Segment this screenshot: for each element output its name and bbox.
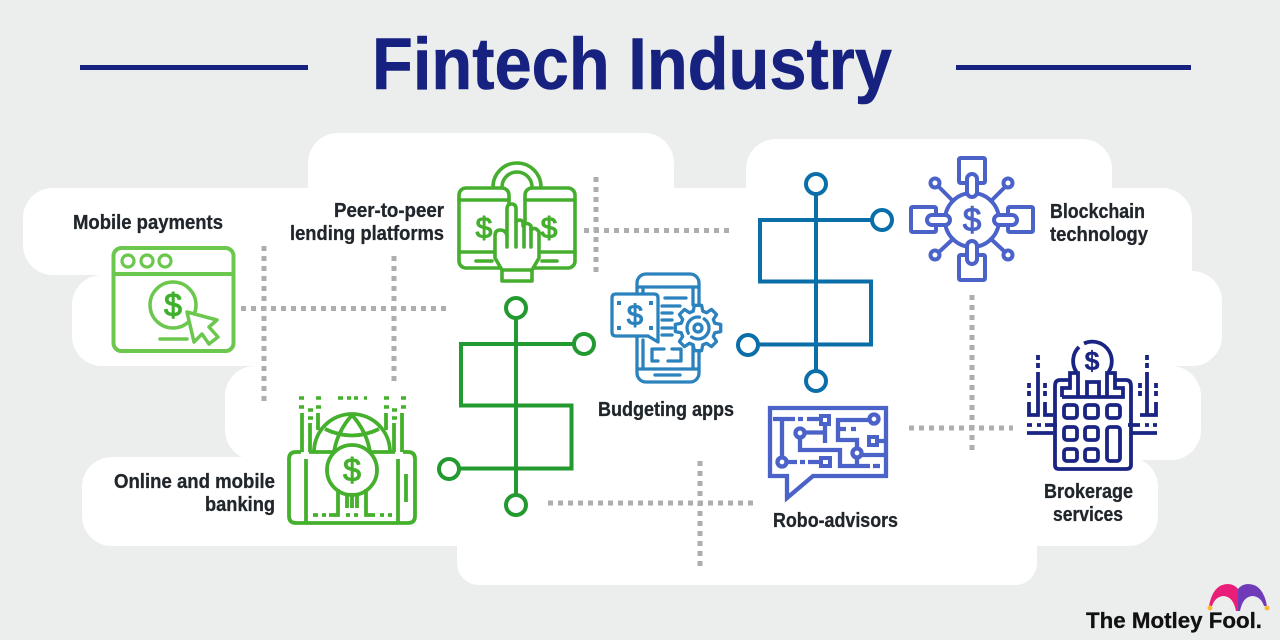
label: blockchain technology: Blockchain bbox=[1050, 201, 1145, 223]
label: blockchain technology bbox=[1050, 201, 1149, 246]
label: online and mobile banking: banking bbox=[205, 494, 275, 516]
label: budgeting apps: Budgeting apps bbox=[598, 399, 734, 421]
blue flow diagram bbox=[738, 174, 892, 391]
icon: browser window with dollar and cursor: $ bbox=[164, 287, 182, 323]
label: brokerage services bbox=[1044, 481, 1133, 526]
icon: two phones with hand bbox=[459, 163, 575, 281]
label: blockchain technology: technology bbox=[1050, 224, 1149, 246]
label: brokerage services: Brokerage bbox=[1044, 481, 1133, 503]
icon: phone with dollar bubble and gear bbox=[612, 274, 721, 382]
label: peer-to-peer lending platforms: lending platforms bbox=[290, 223, 444, 245]
label: online and mobile banking: Online and mobile bbox=[114, 471, 275, 493]
label: robo-advisors: Robo-advisors bbox=[773, 510, 898, 532]
title: Fintech Industry bbox=[372, 24, 892, 105]
logo: The Motley Fool: The Motley Fool. bbox=[1086, 608, 1262, 633]
white cloud background panel bbox=[23, 133, 1222, 585]
icon: brokerage building: $ bbox=[1084, 346, 1100, 376]
label: mobile payments: Mobile payments bbox=[73, 212, 223, 234]
label: peer-to-peer lending platforms bbox=[290, 200, 444, 245]
title rule right bbox=[956, 65, 1191, 70]
icon: globe and phone banking: $ bbox=[343, 452, 361, 488]
dotted connector: peer-to-peer bbox=[584, 177, 730, 272]
dotted connector: bottom centre bbox=[548, 461, 754, 566]
title rule left bbox=[80, 65, 308, 70]
label: brokerage services: services bbox=[1053, 504, 1123, 526]
icon: circuit speech bubble bbox=[770, 408, 886, 498]
green flow diagram bbox=[439, 298, 594, 515]
label: peer-to-peer lending platforms: Peer-to-peer bbox=[334, 200, 444, 222]
icon: blockchain network bbox=[911, 158, 1033, 280]
icon: globe and phone banking bbox=[289, 398, 415, 524]
logo: The Motley Fool bbox=[1086, 584, 1270, 633]
label: online and mobile banking bbox=[114, 471, 275, 516]
icon: phone with dollar bubble and gear: $ bbox=[627, 300, 643, 332]
icon: two phones with hand: $ bbox=[541, 212, 558, 245]
dotted connector: mobile payments bbox=[241, 246, 447, 401]
icon: blockchain network: $ bbox=[963, 201, 981, 238]
icon: browser window with dollar and cursor bbox=[114, 248, 234, 351]
icon: two phones with hand: $ bbox=[476, 212, 493, 245]
dotted connector: right side bbox=[909, 295, 1013, 450]
icon: brokerage building bbox=[1027, 342, 1157, 469]
